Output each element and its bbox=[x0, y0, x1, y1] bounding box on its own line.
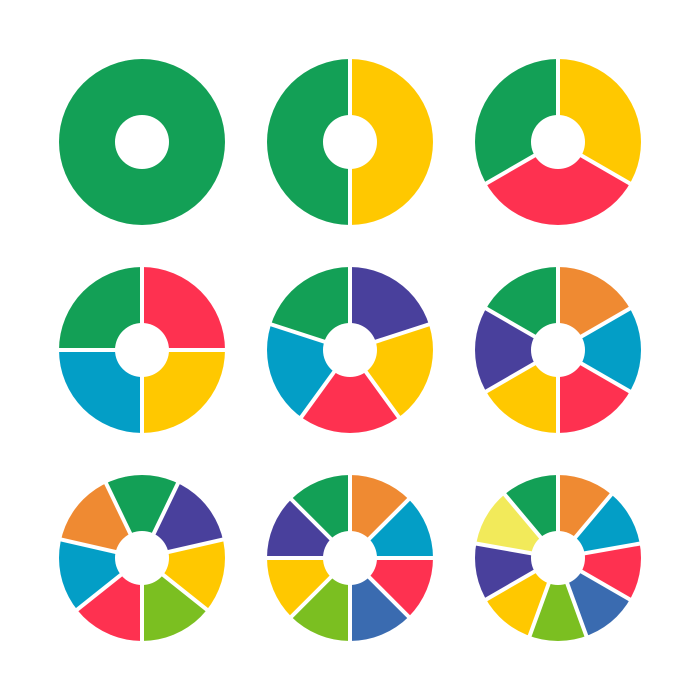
donut: 5 segments bbox=[267, 267, 433, 433]
donut: 9 segments bbox=[475, 475, 641, 641]
donut: 7 segments bbox=[59, 475, 225, 641]
donut: 4 segments bbox=[59, 267, 225, 433]
donut: 2 segments bbox=[267, 59, 433, 225]
donut: 6 segments bbox=[475, 267, 641, 433]
donut: 3 segments bbox=[475, 59, 641, 225]
donut: 1 segment bbox=[59, 59, 225, 225]
donut: 8 segments bbox=[267, 475, 433, 641]
